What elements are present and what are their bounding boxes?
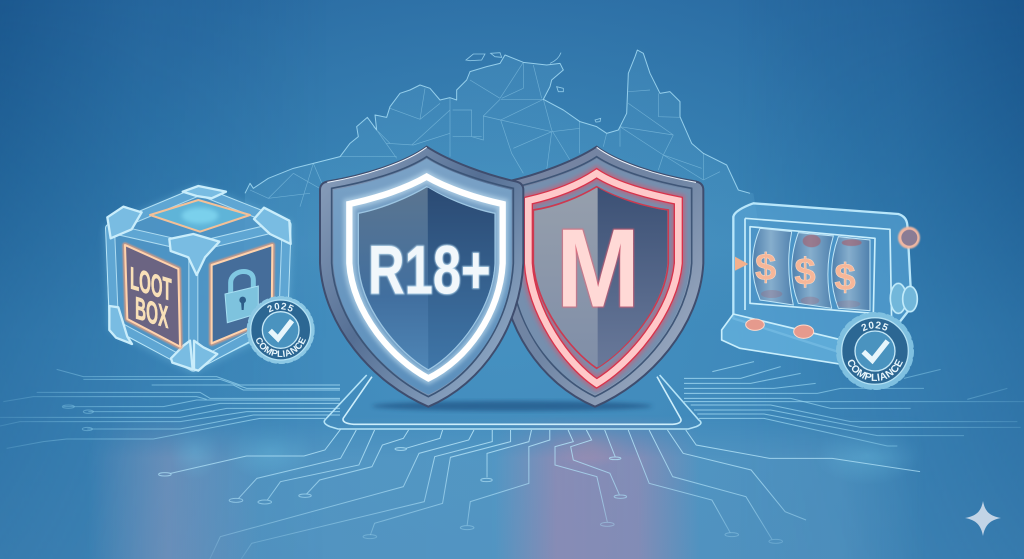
lever knob (890, 283, 917, 313)
lever orb (898, 227, 920, 249)
reel dollar signs: $ (794, 251, 816, 294)
right orange panel (212, 245, 272, 343)
badge: 2025 compliance (246, 296, 315, 364)
cube body (107, 187, 290, 370)
badge: 2025 compliance: COMPLIANCE (848, 359, 903, 381)
cube glow (105, 185, 292, 373)
reel dollar signs: $ (834, 256, 856, 299)
loot box: LOOT (130, 260, 172, 308)
M letter: M (556, 207, 640, 331)
loot box (102, 184, 315, 374)
M letter: M (556, 207, 640, 331)
reel dollar signs (755, 246, 856, 299)
platform and circuit traces (159, 375, 920, 559)
icon: four-point sparkle (965, 501, 1001, 536)
shield: M rating (500, 147, 703, 407)
left circuit lines (0, 369, 340, 448)
coins (746, 319, 814, 338)
top orange panel (150, 200, 250, 232)
M shield glowing band (528, 173, 678, 383)
badge: 2025 compliance: 2025 (267, 302, 294, 312)
map of northern Australia (243, 50, 777, 330)
slot machine (720, 202, 921, 390)
platform outline (324, 375, 701, 429)
shield: R18+ rating (320, 147, 523, 407)
reflections on the floor (85, 415, 925, 559)
badge: 2025 compliance (836, 312, 914, 390)
corner brackets (107, 186, 291, 371)
machine body (733, 203, 912, 357)
right circuit lines (684, 362, 1024, 446)
reel dollar signs: $ (755, 246, 776, 289)
badge: 2025 compliance: 2025 (861, 322, 888, 332)
glass edges (110, 191, 287, 367)
icon: padlock (225, 271, 258, 323)
R18+ shield white band (349, 177, 503, 378)
machine base (722, 314, 870, 367)
left orange panel (125, 245, 180, 347)
LOOT BOX label: BOX (135, 290, 169, 335)
pointer arrow (735, 257, 748, 271)
lower circuit lines with nodes (159, 429, 920, 559)
slot reels (752, 228, 870, 311)
R18+ label: R18+ (368, 232, 491, 308)
shadow beneath shields (372, 401, 652, 411)
R18+ label: R18+ (368, 232, 491, 308)
reel partial symbols (761, 235, 862, 308)
LOOT BOX label (130, 260, 172, 336)
badge: 2025 compliance: COMPLIANCE (256, 337, 306, 357)
